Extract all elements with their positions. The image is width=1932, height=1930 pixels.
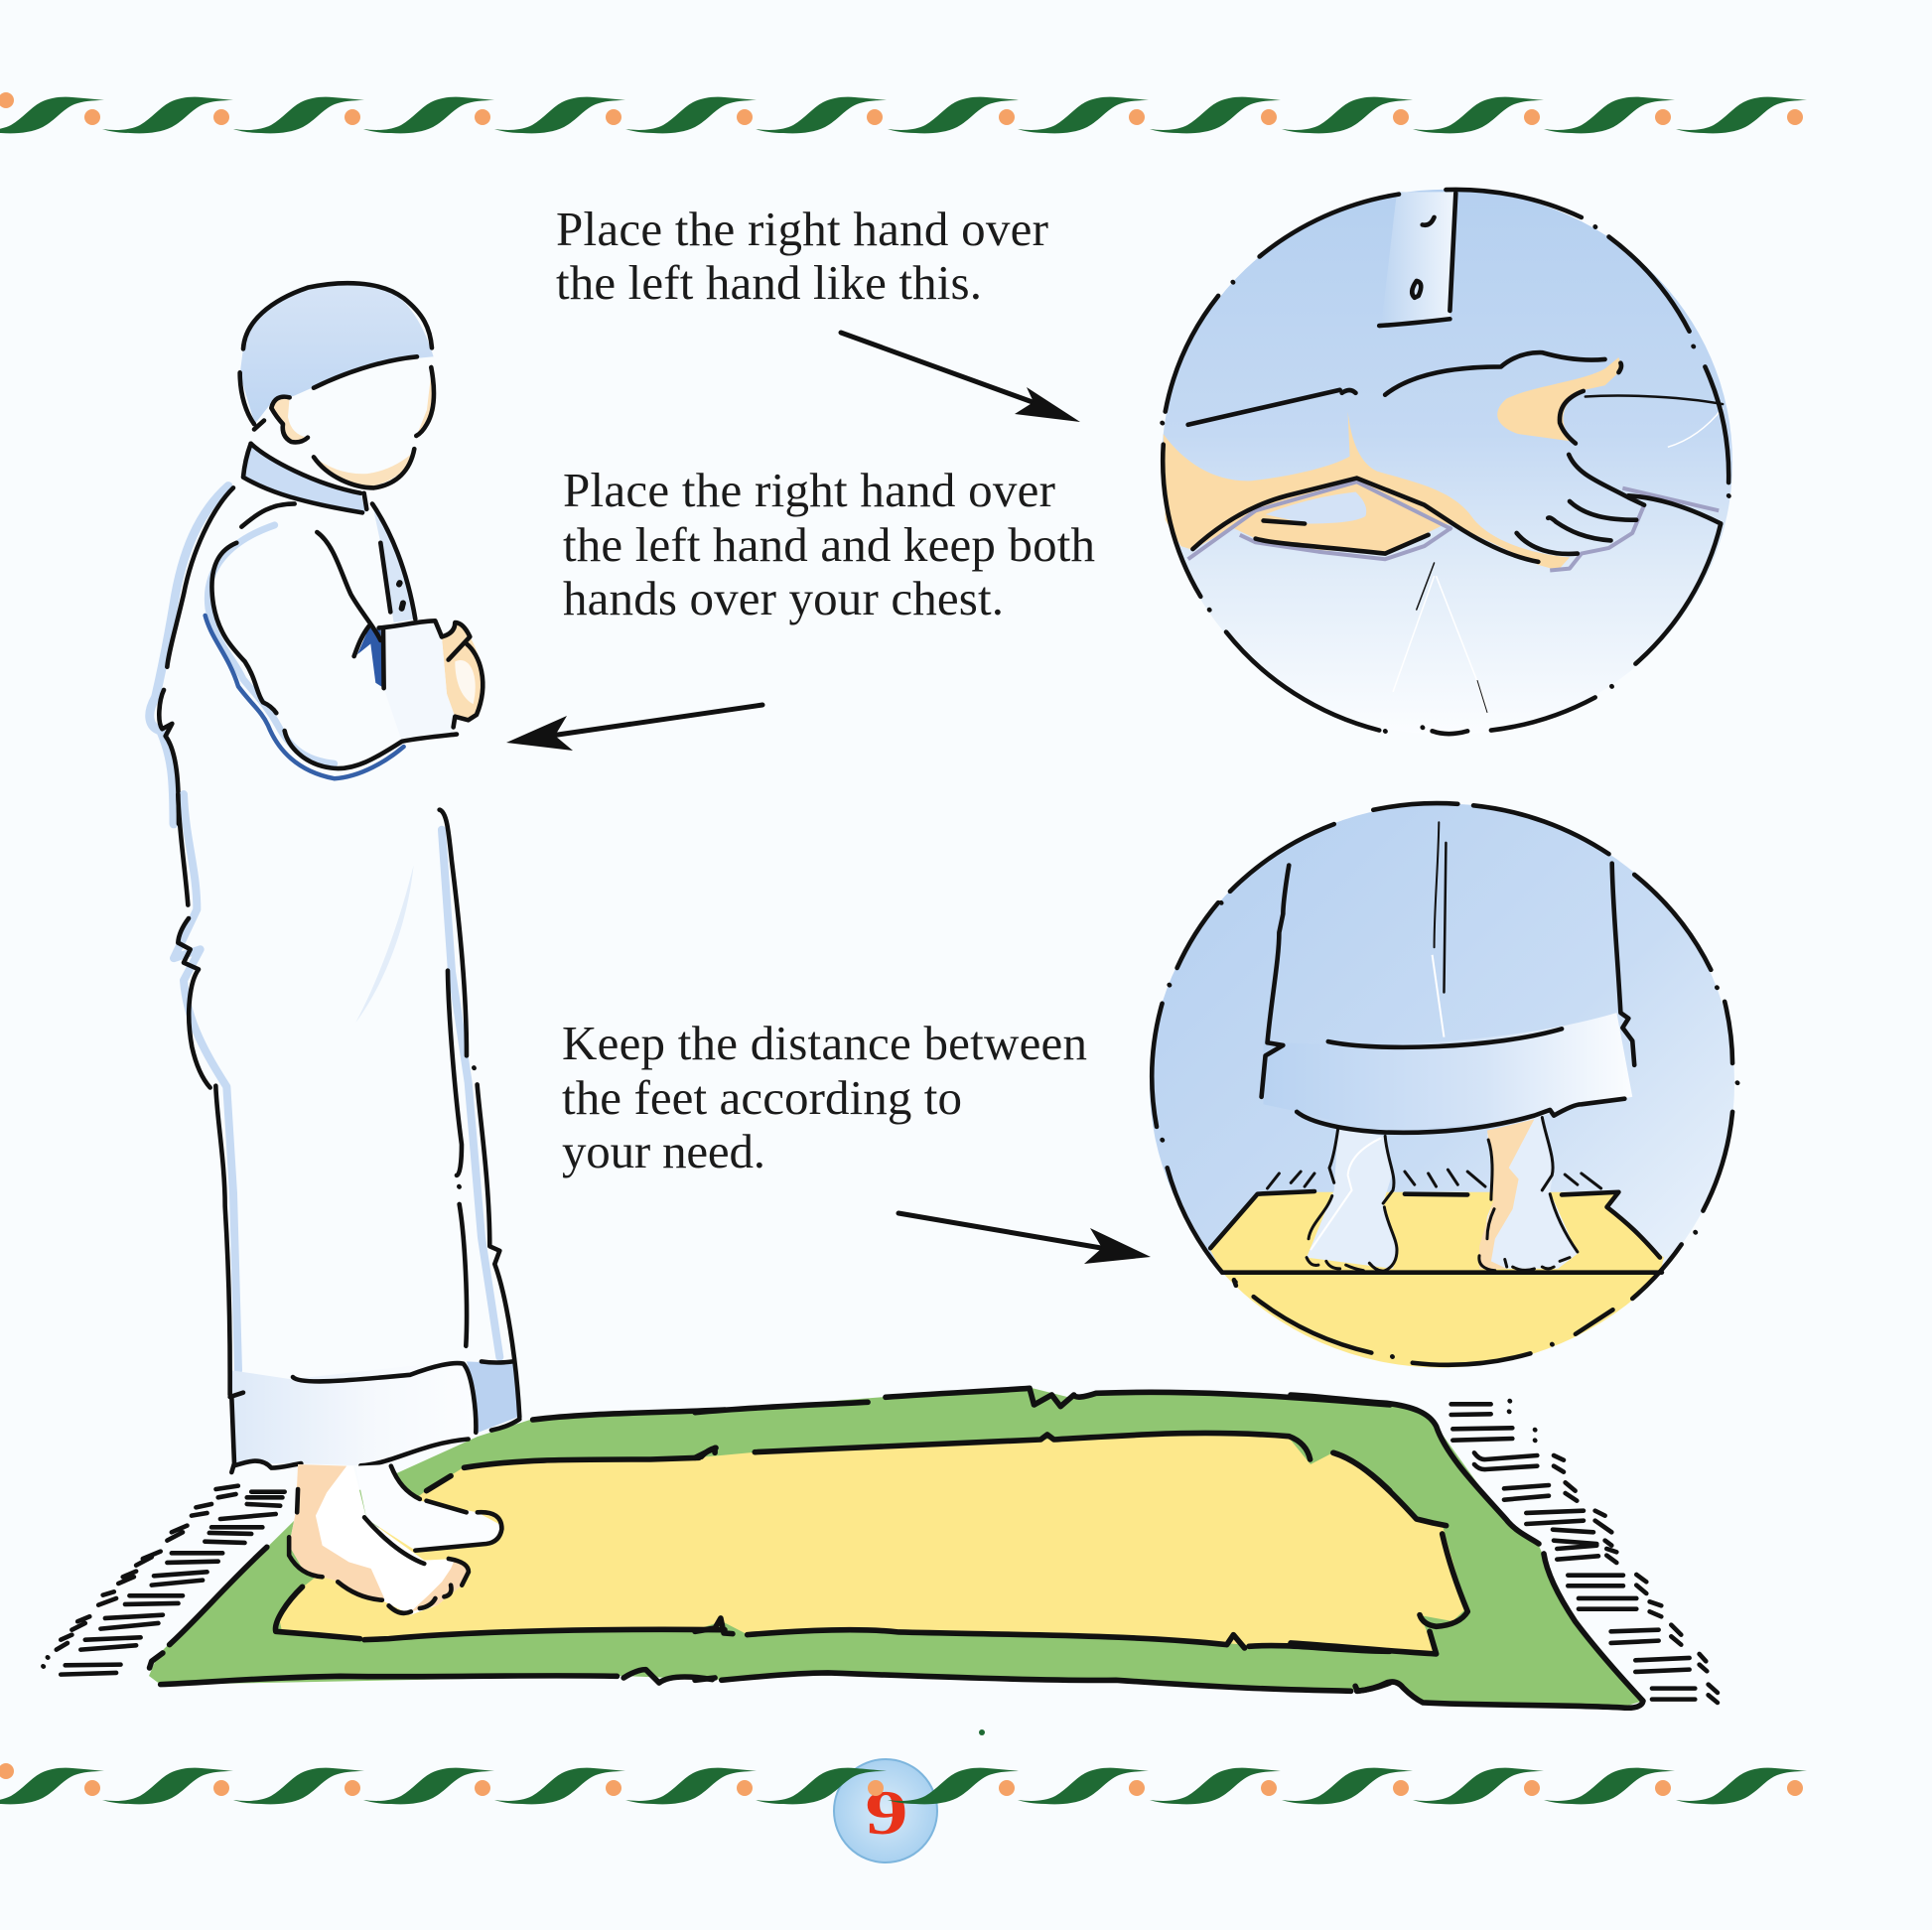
- arrow to hand detail: [841, 333, 1080, 422]
- feet line art: [289, 1466, 501, 1613]
- ear skin: [271, 397, 308, 442]
- instruction text: distance between feet: Keep the distance between: [562, 1016, 1087, 1070]
- gap over forearm: [1266, 491, 1366, 523]
- inset background: [1150, 803, 1734, 1364]
- hand skin: [442, 622, 483, 720]
- circle inset: feet close-up: [1150, 803, 1737, 1368]
- instruction text: hand detail: the left hand like this.: [556, 255, 982, 310]
- left leg: [1307, 1129, 1397, 1269]
- instruction text: hands over chest: hands over your chest.: [563, 571, 1004, 625]
- robe lower: skirt and hem: [174, 794, 519, 1472]
- fold highlight: [355, 865, 414, 1023]
- bottom decorative border: [0, 1763, 1807, 1804]
- collar fill: [243, 444, 365, 512]
- inset line art: [1163, 190, 1729, 734]
- right leg: [1479, 1116, 1578, 1269]
- sleeve shadow: [1188, 482, 1719, 571]
- arrow to feet detail: [898, 1213, 1151, 1264]
- highlight: [1393, 408, 1723, 707]
- cuff: [383, 620, 455, 742]
- rug green border: [149, 1388, 1643, 1708]
- arm dark shadow: [206, 616, 404, 778]
- arm light shadow: [207, 525, 335, 763]
- instruction text: distance between feet: your need.: [562, 1124, 765, 1178]
- cap fill: [240, 282, 434, 424]
- instruction text: hands over chest: the left hand and keep both: [563, 517, 1095, 572]
- prayer rug: [43, 1388, 1718, 1708]
- instruction text: distance between feet: [562, 1016, 1087, 1178]
- left fringe: [43, 1486, 285, 1675]
- feet: [289, 1464, 501, 1615]
- instruction text: hand detail: Place the right hand over: [556, 202, 1048, 256]
- hem fill: [231, 1364, 477, 1465]
- right leg skin: [1479, 1119, 1534, 1269]
- rug yellow centre: [278, 1432, 1466, 1653]
- circle inset: hands close-up: [1162, 190, 1732, 735]
- inset background: [1162, 190, 1732, 735]
- front foot: [289, 1464, 469, 1615]
- upper line art: [159, 283, 483, 824]
- robe hem band: [1264, 1013, 1632, 1133]
- inside hem blue: [467, 1361, 518, 1433]
- instruction text: hands over chest: [563, 463, 1095, 625]
- front foot skin: [289, 1464, 469, 1611]
- page number badge: 9: [865, 1778, 908, 1848]
- lower line art: [178, 794, 519, 1472]
- hand highlight: [455, 660, 476, 704]
- shirt placket: [1381, 192, 1455, 326]
- placket shade: [372, 503, 415, 622]
- rug in inset: [1210, 1192, 1664, 1368]
- arrow to chest: [506, 705, 762, 751]
- face skin shading: [313, 367, 435, 486]
- forearm and hand skin: [1164, 412, 1570, 571]
- thumb skin: [1497, 357, 1622, 442]
- inset line art: [1152, 803, 1737, 1365]
- top decorative border: [0, 92, 1807, 133]
- dark inner sleeve: [357, 627, 384, 688]
- left robe shadow: [174, 794, 238, 1370]
- instruction text: distance between feet: the feet according to: [562, 1070, 962, 1125]
- white highlights: [1311, 955, 1444, 1250]
- standing boy figure: [150, 282, 519, 1615]
- robe upper: body, cap, face and folded arms: [150, 282, 483, 824]
- stray speck: [979, 1729, 985, 1735]
- right fringe: [1451, 1401, 1718, 1703]
- rug outline left: [150, 1410, 725, 1685]
- rug outline right: [1291, 1395, 1643, 1708]
- instruction text: hands over chest: Place the right hand over: [563, 463, 1055, 517]
- right robe shadow: [442, 830, 499, 1357]
- sleeve gap: [1260, 491, 1366, 523]
- rug outline middle: [695, 1388, 1390, 1691]
- robe back shadow: [150, 486, 228, 824]
- page number badge: [834, 1759, 937, 1862]
- instruction text: hand detail: [556, 202, 1048, 310]
- back foot: [355, 1464, 501, 1551]
